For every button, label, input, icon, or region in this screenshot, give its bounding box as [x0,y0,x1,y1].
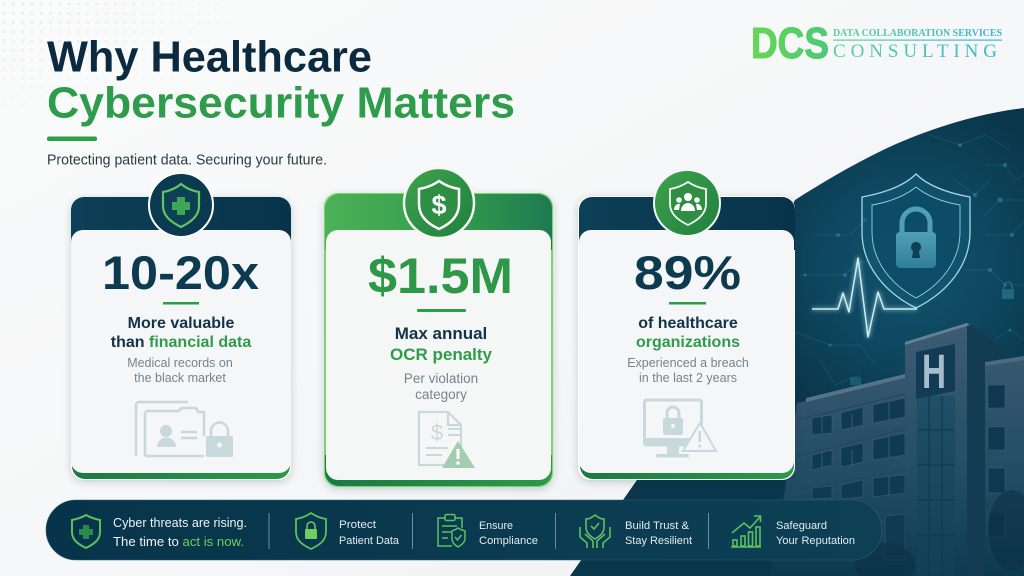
icon: large shield with lock [862,174,970,308]
item: build trust: Stay Resilient [625,535,692,547]
item: ensure compliance: Compliance [479,535,538,547]
panel: bottom action bar [46,500,882,560]
icon: monitor lock warning [644,400,716,458]
divider [163,302,199,304]
callout text: Cyber threats are rising. [113,515,247,530]
heading [636,315,740,351]
heading: than financial data [111,334,251,351]
item: build trust: Build Trust & [625,520,690,532]
icon: shield plus [72,515,100,548]
description: in the last 2 years [639,371,737,385]
small ghost locks [850,282,1014,385]
building: right wing [985,356,1024,576]
item: protect patient data: Protect [339,519,376,531]
item: build trust [580,515,692,548]
title: Why Healthcare [47,32,372,82]
panel: card 3 [578,170,795,480]
item: ensure compliance: Ensure [479,520,513,532]
title underline [47,136,97,141]
divider [417,309,466,312]
description [127,356,233,385]
description: category [415,387,467,402]
item: safeguard reputation: Safeguard [776,520,827,532]
logo: CONSULTING [833,41,997,62]
heading: of healthcare [638,315,738,332]
title [47,32,515,128]
building: left wing [770,376,905,576]
icon: invoice with warning [418,412,475,468]
heading: organizations [636,334,740,351]
description [627,356,749,385]
left wing windows [812,398,905,560]
heading: OCR penalty [390,345,493,364]
item: protect patient data: Patient Data [339,535,400,547]
panel: hospital illustration [570,108,1024,576]
description: Medical records on [127,356,233,370]
item: safeguard reputation: Your Reputation [776,535,855,547]
description: Per violation [404,371,478,386]
tower glass [917,396,955,576]
building: tower [905,323,967,576]
logo: DCS [751,19,829,68]
icon: shield people badge [654,170,720,236]
item: safeguard reputation [731,516,855,547]
icon: shield plus badge [149,173,213,237]
logo [751,19,1002,68]
description: Experienced a breach [627,356,749,370]
stat number: 10-20x [102,246,259,299]
heading: Max annual [395,324,487,343]
heading [390,324,493,364]
trees [855,490,1024,576]
panel: card 1 [71,173,291,480]
item: protect patient data [296,513,400,549]
subtitle: Protecting patient data. Securing your future. [47,152,327,168]
description [404,371,478,402]
callout text: The time to act is now. [113,534,244,549]
icon: shield dollar badge [404,168,474,238]
callout text [113,515,247,549]
network lines [790,135,1024,385]
item: ensure compliance [438,514,538,547]
icon: invoice with warning: $ [431,420,443,445]
stat number: 89% [634,246,741,299]
heading [111,315,251,351]
divider [669,302,706,304]
stat number: $1.5M [368,248,513,304]
logo: DATA COLLABORATION SERVICES [833,28,1002,39]
hospital H sign: H [922,346,946,399]
title: Cybersecurity Matters [47,78,515,128]
icon: shield dollar badge: $ [431,190,447,220]
heading: More valuable [128,315,234,332]
description: the black market [134,371,226,385]
icon: heartbeat line [812,258,917,337]
icon: folder with lock [136,402,233,457]
panel: card 2 [324,168,553,487]
